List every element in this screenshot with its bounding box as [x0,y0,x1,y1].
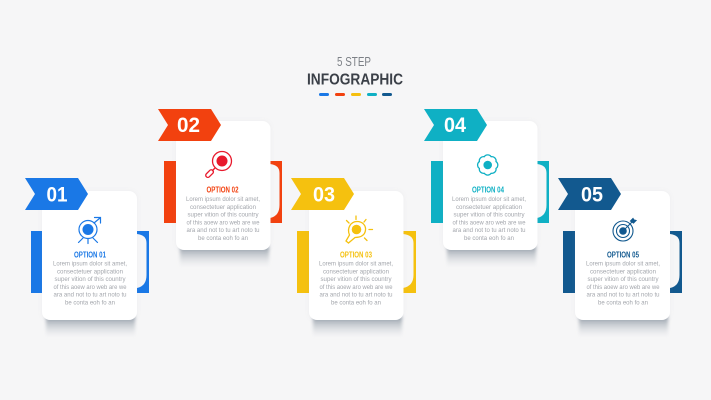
body text: ara and not to tu art noto tu [54,292,127,299]
body text: of this aoew aro web are we [320,284,393,291]
body text: super vition of this country [454,212,525,219]
option label: OPTION 03 [340,250,372,260]
banner: 05: 05 [581,184,603,206]
banner: 01 [25,178,88,210]
body text: be conta eoh fo an [65,300,115,306]
body text: Lorem ipsum dolor sit amet, [586,260,660,268]
body text: ara and not to tu art noto tu [320,292,393,299]
body text [452,196,526,242]
banner: 04 [424,109,487,141]
panel: option 02 [158,109,282,267]
banner: 05 [558,178,621,210]
option label: OPTION 01 [74,250,106,260]
body text: ara and not to tu art noto tu [186,227,260,234]
body text: consectetuer application [590,268,656,275]
body text: consectetuer application [456,204,522,211]
body text: consectetuer application [57,268,123,275]
body text: be conta eoh fo an [198,235,248,242]
banner: 02: 02 [177,114,200,137]
body text: consectetuer application [190,204,256,211]
body text: of this aoew aro web are we [586,284,660,291]
colour dash row [319,93,392,96]
body text: super vition of this country [320,276,392,283]
title: 5 STEP [337,54,371,69]
title: INFOGRAPHIC [307,72,403,88]
title [307,54,403,88]
body text: of this aoew aro web are we [186,219,260,226]
body text: be conta eoh fo an [464,235,514,242]
icon: gear flower [478,155,498,175]
body text: Lorem ipsum dolor sit amet, [53,260,127,268]
panel: option 01 [25,178,149,337]
option label: OPTION 05 [607,250,639,260]
panel: option 03 [291,178,416,337]
option label: OPTION 04 [472,186,504,194]
panel: option 05 [558,178,682,337]
body text: Lorem ipsum dolor sit amet, [452,196,526,203]
body text: ara and not to tu art noto tu [586,292,660,299]
body text: Lorem ipsum dolor sit amet, [319,260,393,268]
banner: 04: 04 [444,114,466,137]
body text: be conta eoh fo an [598,300,648,306]
body text: of this aoew aro web are we [54,284,127,291]
body text: ara and not to tu art noto tu [452,227,526,234]
banner: 01: 01 [46,184,68,206]
body text [586,260,660,306]
body text: Lorem ipsum dolor sit amet, [186,196,260,203]
icon: bullseye [613,218,636,241]
icon: target with arrow [78,218,100,244]
body text: of this aoew aro web are we [452,219,526,226]
body text: super vition of this country [588,276,659,283]
banner: 03 [291,178,354,210]
icon: light bulb [346,216,372,243]
banner: 02 [158,109,221,141]
icon: magnifier [205,152,232,178]
body text [186,196,260,242]
body text: consectetuer application [323,268,389,275]
body text: super vition of this country [54,276,126,283]
body text [319,260,393,306]
body text: be conta eoh fo an [331,300,381,306]
body text: super vition of this country [188,212,259,219]
option label: OPTION 02 [206,186,239,194]
banner: 03: 03 [313,184,335,206]
body text [53,260,127,306]
panel: option 04 [424,109,549,267]
